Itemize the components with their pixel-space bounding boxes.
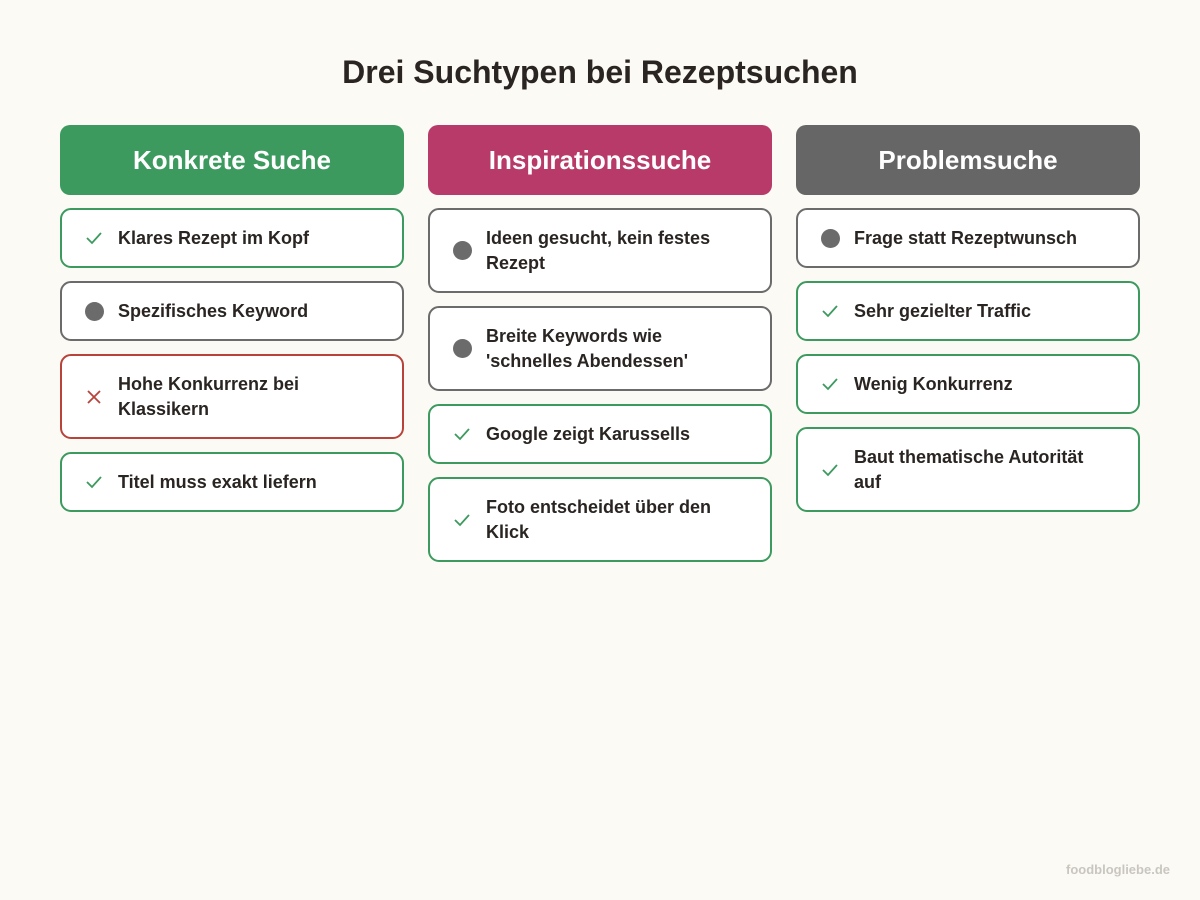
header: Konkrete Suche bbox=[60, 125, 404, 195]
card: Karussells bbox=[428, 404, 772, 464]
card: Breite Keywords: 'schnelles Abendessen' bbox=[486, 350, 688, 370]
panel: Konkrete Suche bbox=[60, 125, 404, 512]
header: Konkrete Suche: Konkrete Suche bbox=[133, 144, 331, 174]
card: Autorität: auf bbox=[854, 472, 881, 492]
card: Titel muss exakt liefern bbox=[60, 452, 404, 512]
card: Frage statt Rezeptwunsch: Frage statt Rezeptwunsch bbox=[854, 228, 1077, 248]
card: Karussells: Google zeigt Karussells bbox=[486, 424, 690, 444]
card: Foto entscheidet bbox=[428, 477, 772, 562]
card: Ideen gesucht bbox=[428, 208, 772, 293]
card: Spezifisches Keyword bbox=[60, 281, 404, 341]
header: Inspirationssuche: Inspirationssuche bbox=[489, 144, 711, 174]
card: Klares Rezept: Klares Rezept im Kopf bbox=[118, 228, 309, 248]
card: Autorität: Baut thematische Autorität bbox=[854, 446, 1083, 466]
panel: Inspirationssuche bbox=[428, 125, 772, 562]
card: Frage statt Rezeptwunsch bbox=[796, 208, 1140, 268]
title: Drei Suchtypen bei Rezeptsuchen bbox=[342, 54, 858, 90]
card: Ideen gesucht: Ideen gesucht, kein festes Rezept bbox=[486, 228, 710, 272]
footer watermark: foodblogliebe.de bbox=[1066, 862, 1170, 877]
card: Titel muss exakt liefern: Titel muss exakt liefern bbox=[118, 472, 317, 492]
card: Hohe Konkurrenz bbox=[60, 354, 404, 439]
card: Foto entscheidet: Foto entscheidet über den Klick bbox=[486, 496, 711, 542]
header: Problemsuche bbox=[796, 125, 1140, 195]
card: Sehr gezielter Traffic bbox=[796, 281, 1140, 341]
header: Problemsuche: Problemsuche bbox=[878, 144, 1058, 174]
card: Klares Rezept bbox=[60, 208, 404, 268]
card: Autorität bbox=[796, 427, 1140, 512]
card: Wenig Konkurrenz bbox=[796, 354, 1140, 414]
card: Breite Keywords: Breite Keywords wie bbox=[486, 326, 662, 346]
header: Inspirationssuche bbox=[428, 125, 772, 195]
card: Breite Keywords bbox=[428, 306, 772, 391]
panel: Problemsuche bbox=[796, 125, 1140, 512]
card: Spezifisches Keyword: Spezifisches Keyword bbox=[118, 300, 308, 320]
card: Sehr gezielter Traffic: Sehr gezielter Traffic bbox=[854, 300, 1031, 320]
card: Wenig Konkurrenz: Wenig Konkurrenz bbox=[854, 374, 1013, 394]
card: Hohe Konkurrenz: Hohe Konkurrenz bei Klassikern bbox=[118, 374, 299, 418]
